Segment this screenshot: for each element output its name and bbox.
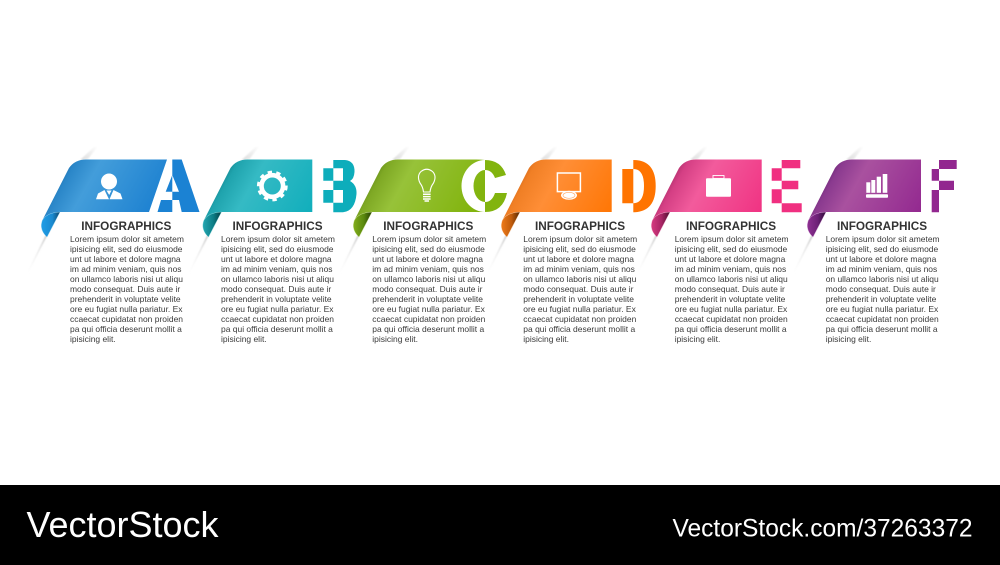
text block: ore eu fugiat nulla pariatur. Ex [372,304,486,314]
text block: unt ut labore et dolore magna [221,254,332,264]
text block: on ullamco laboris nisi ut aliqu [826,274,939,284]
text block: modo consequat. Duis aute ir [372,284,483,294]
text block: ccaecat cupidatat non proiden [523,314,637,324]
text block: im ad minim veniam, quis nos [221,264,333,274]
ribbon: F [808,160,921,220]
panel: A [25,146,200,344]
text block: on ullamco laboris nisi ut aliqu [523,274,637,284]
text block: ccaecat cupidatat non proiden [70,314,183,324]
text block: pa qui officia deserunt mollit a [826,324,938,334]
panel: E [635,146,802,344]
letter A [158,160,200,212]
text block: im ad minim veniam, quis nos [372,264,484,274]
ribbon fold: D [501,212,520,237]
ribbon fold: F [807,212,826,237]
heading: INFOGRAPHICS [81,220,172,233]
ribbon fold: B [203,212,222,237]
letter F [932,160,957,212]
text block: ipisicing elit, sed do eiusmode [221,244,334,254]
text block: unt ut labore et dolore magna [70,254,181,264]
ribbon: A [42,160,167,220]
text block: on ullamco laboris nisi ut aliqu [70,274,183,284]
letter D [622,160,656,212]
text block: pa qui officia deserunt mollit a [675,324,787,334]
text block: pa qui officia deserunt mollit a [372,324,484,334]
letter C [462,160,507,212]
text block: pa qui officia deserunt mollit a [523,324,635,334]
ribbon fold: A [41,212,60,237]
icon: person [96,174,122,199]
text block: ccaecat cupidatat non proiden [221,314,334,324]
text block: Lorem ipsum dolor sit ametem [523,234,637,244]
watermark bar [0,485,1000,565]
text block: prehenderit in voluptate velite [221,294,332,304]
text block: modo consequat. Duis aute ir [70,284,180,294]
ribbon: D [502,160,612,220]
text block: ipisicing elit. [70,334,116,344]
panel: C [337,146,507,344]
text block: ipisicing elit, sed do eiusmode [675,244,787,254]
text block: im ad minim veniam, quis nos [70,264,182,274]
text block: ipisicing elit. [523,334,569,344]
text block: Lorem ipsum dolor sit ametem [70,234,184,244]
panel: B [186,146,357,344]
panel: F [791,146,957,344]
text block: pa qui officia deserunt mollit a [70,324,182,334]
text block: prehenderit in voluptate velite [70,294,181,304]
text block: ipisicing elit. [675,334,720,344]
icon: light bulb [418,169,435,201]
text block: modo consequat. Duis aute ir [675,284,785,294]
letter E [772,160,802,212]
text block: ipisicing elit, sed do eiusmode [523,244,636,254]
panel: D [485,146,656,344]
ribbon fold: C [353,212,372,237]
text block: unt ut labore et dolore magna [675,254,786,264]
text block: modo consequat. Duis aute ir [221,284,331,294]
text block: prehenderit in voluptate velite [826,294,937,304]
heading: INFOGRAPHICS [837,220,927,233]
text block: Lorem ipsum dolor sit ametem [826,234,940,244]
text block: ore eu fugiat nulla pariatur. Ex [826,304,939,314]
text block: unt ut labore et dolore magna [826,254,937,264]
letter B [323,160,357,212]
text block: ipisicing elit, sed do eiusmode [372,244,485,254]
text block: prehenderit in voluptate velite [372,294,483,304]
text block: ore eu fugiat nulla pariatur. Ex [523,304,637,314]
text block: Lorem ipsum dolor sit ametem [675,234,789,244]
text block: on ullamco laboris nisi ut aliqu [221,274,334,284]
text block: prehenderit in voluptate velite [675,294,786,304]
text block: unt ut labore et dolore magna [372,254,483,264]
text block: ipisicing elit. [372,334,418,344]
icon: briefcase [706,176,731,197]
text block: ore eu fugiat nulla pariatur. Ex [221,304,334,314]
text block: im ad minim veniam, quis nos [826,264,937,274]
heading: INFOGRAPHICS [535,220,625,233]
text block: modo consequat. Duis aute ir [523,284,634,294]
text block: unt ut labore et dolore magna [523,254,634,264]
heading: INFOGRAPHICS [383,220,474,233]
text block: ore eu fugiat nulla pariatur. Ex [70,304,183,314]
text block: ccaecat cupidatat non proiden [372,314,486,324]
text block: im ad minim veniam, quis nos [675,264,786,274]
text block: im ad minim veniam, quis nos [523,264,635,274]
icon: bar chart [866,174,888,198]
text block: on ullamco laboris nisi ut aliqu [675,274,788,284]
text block: ccaecat cupidatat non proiden [826,314,939,324]
text block: ipisicing elit, sed do eiusmode [826,244,938,254]
heading: INFOGRAPHICS [686,220,776,233]
text block: ore eu fugiat nulla pariatur. Ex [675,304,788,314]
ribbon fold: E [651,212,670,237]
text block: ccaecat cupidatat non proiden [675,314,788,324]
ribbon: B [204,160,312,220]
text block: prehenderit in voluptate velite [523,294,634,304]
text block: ipisicing elit. [826,334,871,344]
icon: monitor [557,173,580,200]
ribbon: E [652,160,762,220]
text block: modo consequat. Duis aute ir [826,284,936,294]
text block: ipisicing elit. [221,334,267,344]
icon: gear [259,172,286,200]
text block: ipisicing elit, sed do eiusmode [70,244,183,254]
heading: INFOGRAPHICS [232,220,323,233]
ribbon: C [354,160,485,220]
text block: Lorem ipsum dolor sit ametem [221,234,335,244]
text block: pa qui officia deserunt mollit a [221,324,333,334]
text block: Lorem ipsum dolor sit ametem [372,234,486,244]
watermark logo: VectorStock [26,504,219,545]
text block: on ullamco laboris nisi ut aliqu [372,274,486,284]
watermark url: VectorStock.com/37263372 [672,514,972,542]
